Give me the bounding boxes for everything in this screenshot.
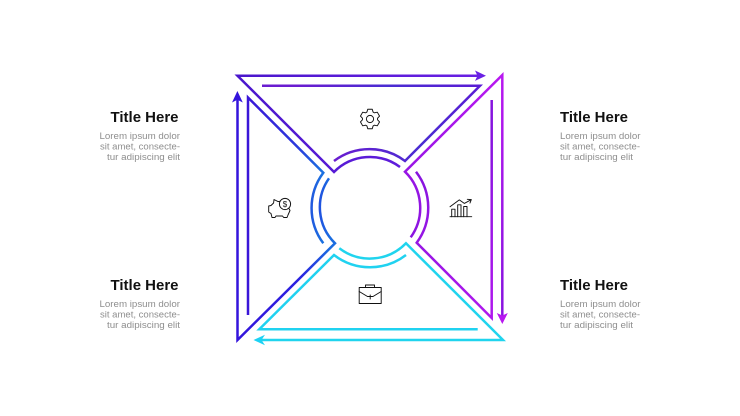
- top inner line and arc: [262, 86, 480, 161]
- panel: left segment outline: [232, 91, 335, 340]
- body text: [560, 299, 641, 330]
- icon: piggy bank with coin: $: [283, 200, 288, 209]
- body text: tur adipiscing elit: [107, 152, 181, 162]
- body text: sit amet, consecte-: [560, 142, 640, 152]
- body text: [100, 131, 181, 162]
- panel: right segment outline: [405, 75, 508, 324]
- body text: tur adipiscing elit: [107, 320, 181, 330]
- heading: Title Here: [560, 278, 628, 294]
- text block: top left: [100, 110, 181, 162]
- icon: bar chart with rising arrow: [450, 199, 472, 217]
- heading: Title Here: [110, 278, 178, 294]
- text block: top right: [560, 110, 641, 162]
- body text: sit amet, consecte-: [560, 310, 640, 320]
- icon: briefcase: [359, 285, 381, 304]
- body text: Lorem ipsum dolor: [560, 299, 641, 309]
- arrow: top outer line with head: [238, 70, 486, 172]
- body text: sit amet, consecte-: [100, 142, 180, 152]
- body text: tur adipiscing elit: [560, 320, 634, 330]
- body text: Lorem ipsum dolor: [100, 299, 180, 309]
- icon: gear: [360, 109, 380, 129]
- panel: bottom segment outline: [254, 243, 503, 345]
- bottom inner line and arc: [259, 255, 478, 329]
- arrow: bottom outer line with head: [254, 243, 503, 345]
- text block: bottom right: [560, 278, 641, 330]
- arrow: left outer line with head: [232, 91, 335, 340]
- body text: Lorem ipsum dolor: [100, 131, 180, 141]
- right inner line and arc: [416, 100, 492, 318]
- text block: bottom left: [100, 278, 181, 330]
- body text: [560, 131, 641, 162]
- left inner line and arc: [248, 98, 323, 315]
- icon: piggy bank with coin: [269, 198, 291, 218]
- heading: Title Here: [560, 110, 628, 126]
- body text: [100, 299, 181, 330]
- heading: Title Here: [110, 110, 178, 126]
- arrow: right outer line with head: [405, 75, 508, 324]
- panel: top segment outline: [238, 70, 486, 172]
- body text: sit amet, consecte-: [100, 310, 180, 320]
- body text: tur adipiscing elit: [560, 152, 634, 162]
- body text: Lorem ipsum dolor: [560, 131, 641, 141]
